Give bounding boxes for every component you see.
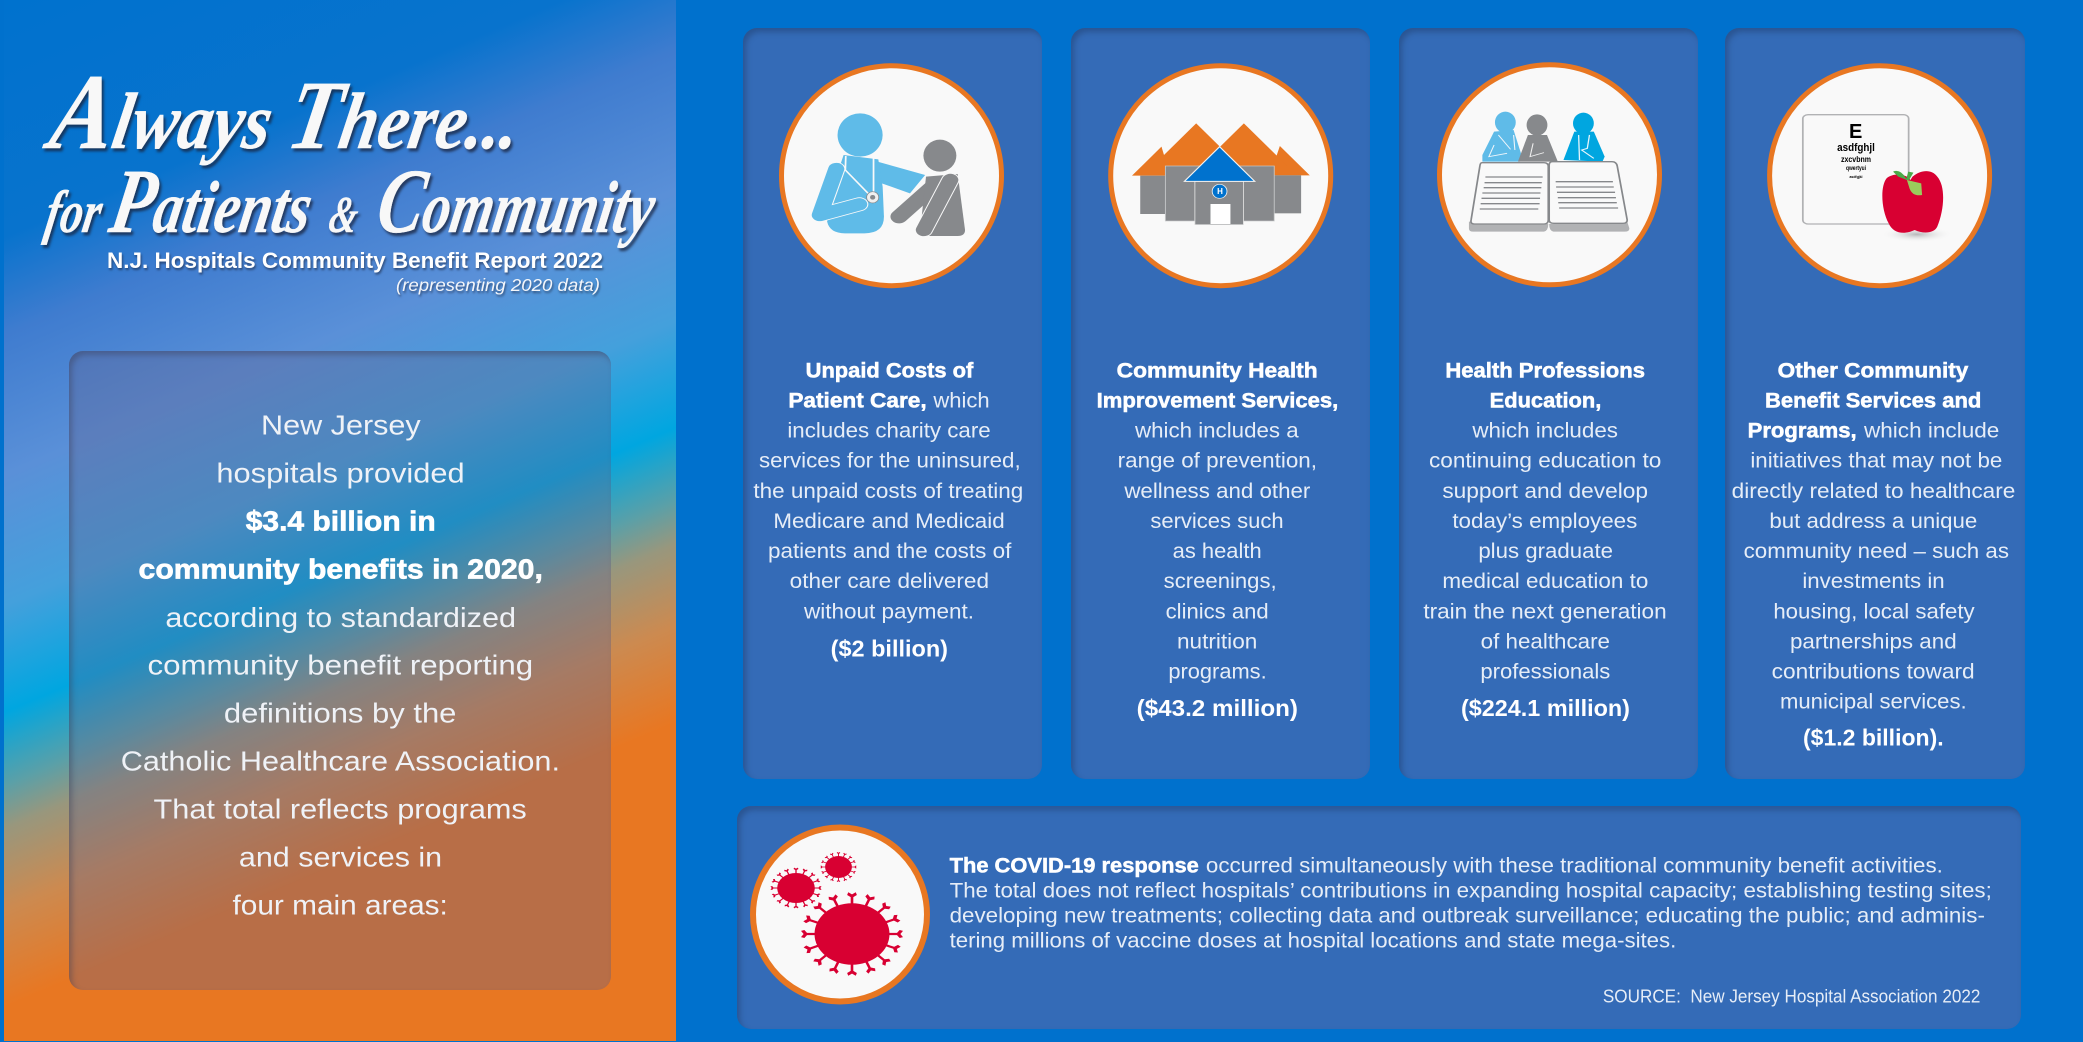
summary text: That total reflects programs xyxy=(154,794,527,825)
summary text: New Jersey xyxy=(261,410,421,441)
card text: community health: clinics and xyxy=(1166,600,1269,623)
card text: other community benefit: housing, local safety xyxy=(1773,600,1975,623)
COVID-19 paragraph: The total does not reflect hospitals’ contributions in expanding hospital capacity; establishing testing sites; xyxy=(950,880,1992,903)
summary text: $3.4 billion in xyxy=(246,506,436,537)
card text: health professions: of healthcare xyxy=(1481,630,1610,653)
summary text: Catholic Healthcare Association. xyxy=(121,746,560,777)
card text: unpaid costs: Unpaid Costs of xyxy=(806,359,974,382)
icon: eye chart and apple: asdfghjl xyxy=(1837,142,1875,154)
card text: other community benefit: Other Community xyxy=(1778,359,1969,382)
icon: hospital buildings: H xyxy=(1217,187,1223,196)
card text: other community benefit: initiatives that may not be xyxy=(1750,450,2002,473)
icon: eye chart and apple: asdfgjkl xyxy=(1850,174,1862,179)
icon: eye chart and apple xyxy=(1770,66,1990,286)
card text: unpaid costs: includes charity care xyxy=(787,420,991,443)
icon: hospital buildings xyxy=(1111,66,1331,286)
icon: eye chart and apple: E xyxy=(1849,121,1862,143)
title: Always There... xyxy=(38,52,532,172)
card text: community health: wellness and other xyxy=(1123,480,1310,503)
title: Patients xyxy=(103,151,321,253)
card text: health professions: support and develop xyxy=(1442,480,1648,503)
card text: community health: which includes a xyxy=(1134,420,1299,443)
summary text: and services in xyxy=(239,841,442,872)
summary text: definitions by the xyxy=(224,697,456,728)
card text: community health: as health xyxy=(1173,540,1262,563)
panel: summary box xyxy=(69,351,611,990)
card text: health professions: today’s employees xyxy=(1452,510,1637,533)
card text: unpaid costs: the unpaid costs of treating xyxy=(753,480,1023,503)
card text: health professions: medical education to xyxy=(1442,570,1648,593)
COVID-19 paragraph: The COVID-19 response xyxy=(950,855,1199,878)
card text: other community benefit: investments in xyxy=(1802,570,1945,593)
card text: community health: range of prevention, xyxy=(1118,450,1317,473)
summary text: community benefits in 2020, xyxy=(139,554,543,585)
COVID-19 paragraph xyxy=(950,855,1992,953)
card text: other community benefit: partnerships and xyxy=(1790,630,1957,653)
title: for xyxy=(41,179,108,246)
title: Community xyxy=(370,151,665,253)
card text: unpaid costs: ($2 billion) xyxy=(831,636,948,662)
card text: community health: programs. xyxy=(1168,661,1267,684)
card text: community health: services such xyxy=(1150,510,1284,533)
card text: unpaid costs: without payment. xyxy=(803,600,974,623)
card text: health professions: which includes xyxy=(1471,420,1618,443)
card text: health professions: ($224.1 million) xyxy=(1461,695,1630,721)
card text: community health xyxy=(1097,359,1338,721)
card text: other community benefit xyxy=(1732,359,2015,751)
summary text: according to standardized xyxy=(165,602,516,633)
card text: unpaid costs: Patient Care, xyxy=(788,389,927,412)
card text: community health: screenings, xyxy=(1164,570,1277,593)
card text: other community benefit: which include xyxy=(1863,420,1999,443)
subtitle: N.J. Hospitals Community Benefit Report 2022 xyxy=(107,248,603,273)
panel: other community benefit card xyxy=(1725,28,2025,779)
panel: unpaid costs card xyxy=(743,28,1042,779)
summary text: four main areas: xyxy=(232,889,448,920)
summary text: hospitals provided xyxy=(216,457,465,488)
card text: other community benefit: ($1.2 billion). xyxy=(1803,725,1944,751)
summary text: community benefit reporting xyxy=(147,650,533,681)
card text: unpaid costs: other care delivered xyxy=(790,570,989,593)
panel: health professions card xyxy=(1399,28,1698,779)
icon: professionals and open book xyxy=(1440,65,1660,285)
card text: health professions: Education, xyxy=(1490,389,1601,412)
panel: left gradient column xyxy=(4,0,676,1041)
title xyxy=(38,52,665,253)
card text: community health: ($43.2 million) xyxy=(1137,695,1298,721)
COVID-19 paragraph: developing new treatments; collecting data and outbreak surveillance; educating the public; and adminis- xyxy=(950,905,1985,928)
card text: health professions: continuing education to xyxy=(1429,450,1661,473)
subtitle: (representing 2020 data) xyxy=(396,275,600,295)
subtitle xyxy=(107,248,603,295)
card text: other community benefit: directly related to healthcare xyxy=(1732,480,2015,503)
card text: other community benefit: but address a unique xyxy=(1769,510,1977,533)
card text: other community benefit: contributions toward xyxy=(1772,661,1975,684)
card text: unpaid costs: Medicare and Medicaid xyxy=(773,510,1005,533)
icon: eye chart and apple: qwertyui xyxy=(1846,166,1866,172)
COVID-19 paragraph: occurred simultaneously with these traditional community benefit activities. xyxy=(1206,855,1943,878)
source credit: SOURCE: New Jersey Hospital Association 2022 xyxy=(1603,986,1980,1007)
card text: health professions: Health Professions xyxy=(1445,359,1645,382)
icon: doctor and patient xyxy=(782,66,1002,286)
card text: health professions: train the next generation xyxy=(1423,600,1667,623)
card text: community health: Improvement Services, xyxy=(1097,389,1338,412)
title: & xyxy=(325,186,363,244)
card text: community health: Community Health xyxy=(1117,359,1318,382)
card text: other community benefit: community need – such as xyxy=(1744,540,2009,563)
summary text xyxy=(121,410,560,920)
icon: eye chart and apple: zxcvbnm xyxy=(1841,154,1871,164)
card text: unpaid costs: which xyxy=(932,389,990,412)
card text: community health: nutrition xyxy=(1177,630,1257,653)
card text: health professions: professionals xyxy=(1480,661,1610,684)
panel: community health card xyxy=(1071,28,1370,779)
card text: other community benefit: Benefit Services and xyxy=(1765,389,1981,412)
card text: unpaid costs xyxy=(753,359,1023,662)
card text: unpaid costs: patients and the costs of xyxy=(768,540,1012,563)
card text: other community benefit: municipal services. xyxy=(1780,691,1967,714)
card text: other community benefit: Programs, xyxy=(1748,420,1857,443)
card text: unpaid costs: services for the uninsured, xyxy=(759,450,1021,473)
COVID-19 paragraph: tering millions of vaccine doses at hospital locations and state mega-sites. xyxy=(950,930,1676,953)
panel: COVID-19 response xyxy=(737,806,2021,1029)
icon: coronavirus xyxy=(753,828,927,1002)
card text: health professions: plus graduate xyxy=(1478,540,1613,563)
card text: health professions xyxy=(1423,359,1667,721)
